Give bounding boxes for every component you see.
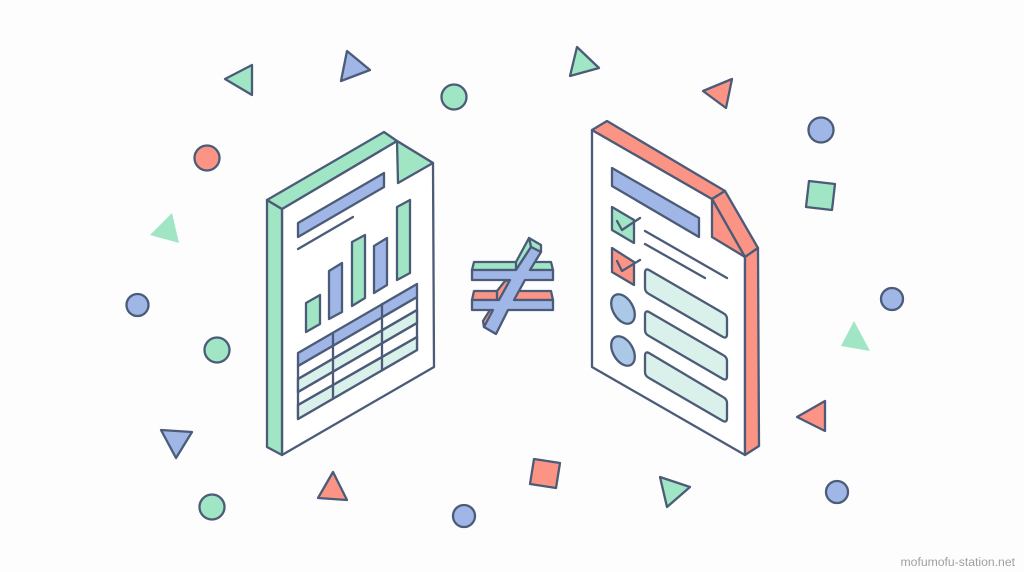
right document: checklist form xyxy=(592,121,759,455)
triangle green no outline xyxy=(150,213,179,243)
triangle red xyxy=(318,472,347,500)
upper bar top face xyxy=(472,262,553,270)
triangle blue xyxy=(341,51,370,81)
circle green xyxy=(204,338,230,362)
circle blue xyxy=(453,505,475,527)
red checkbox xyxy=(612,248,640,285)
lower bar top face xyxy=(472,291,553,300)
circle red xyxy=(194,146,220,170)
heading bar xyxy=(298,173,384,237)
page spine xyxy=(267,200,282,455)
input field 3 xyxy=(645,352,727,422)
not-equal sign xyxy=(472,238,553,334)
slash upper side xyxy=(516,238,531,270)
square green xyxy=(806,181,835,210)
triangle green no outline xyxy=(841,321,870,351)
green checkbox xyxy=(612,207,640,243)
subheading line xyxy=(298,217,353,249)
left document: report with chart and table xyxy=(267,132,434,455)
bar chart xyxy=(306,200,410,332)
triangle green xyxy=(660,477,690,507)
circle blue xyxy=(808,118,834,142)
slash top face xyxy=(529,238,541,252)
circle blue xyxy=(126,294,148,316)
radio option 1 xyxy=(606,290,640,328)
document page xyxy=(592,130,745,455)
triangle red xyxy=(797,401,825,431)
triangle green xyxy=(225,65,252,95)
circle blue xyxy=(826,481,848,503)
watermark: mofumofu-station.net xyxy=(901,555,1016,569)
slash middle side xyxy=(497,280,510,300)
radio option 2 xyxy=(606,332,640,370)
input field 1 xyxy=(645,269,727,338)
data table xyxy=(298,284,417,419)
slash lower side xyxy=(483,310,494,327)
circle green xyxy=(442,84,466,110)
circle blue xyxy=(881,288,903,310)
folded corner xyxy=(397,141,433,183)
top edge xyxy=(592,121,725,199)
heading bar xyxy=(612,168,699,237)
folded edge xyxy=(712,191,758,257)
top edge xyxy=(267,132,397,209)
circle green xyxy=(200,494,224,520)
merged bars and slash front xyxy=(472,247,553,334)
input field 2 xyxy=(645,311,727,380)
right side edge xyxy=(745,248,759,455)
floating shapes xyxy=(126,47,903,527)
square red xyxy=(530,459,560,488)
document page xyxy=(282,141,434,455)
folded corner xyxy=(712,199,745,257)
triangle blue xyxy=(161,430,192,458)
text lines xyxy=(645,231,727,278)
triangle green xyxy=(570,47,599,76)
triangle red xyxy=(703,79,732,108)
